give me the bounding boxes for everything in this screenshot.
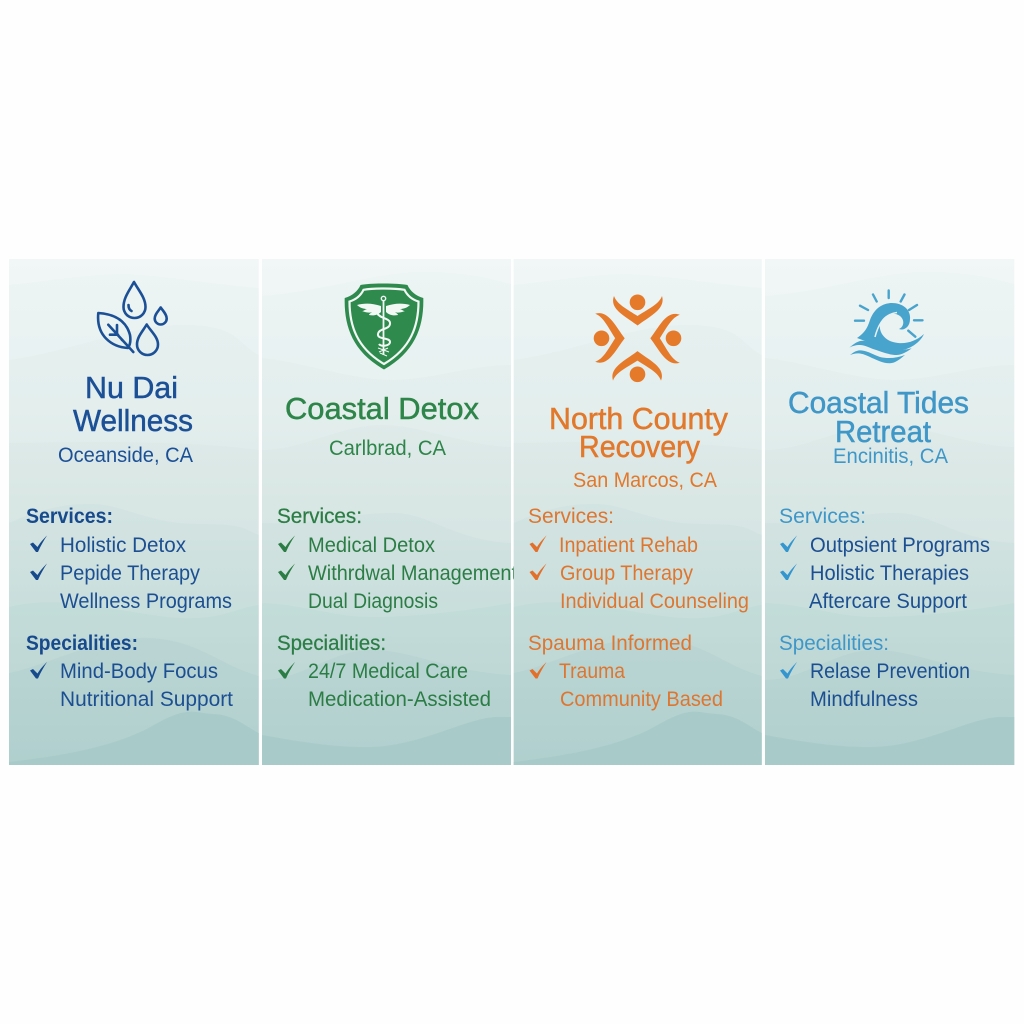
heading: Coastal Tides Retreat <box>788 385 969 449</box>
services list: Services: <box>26 504 113 528</box>
heading: Nu Dai Wellness: Wellness <box>73 403 193 438</box>
heading: North County Recovery <box>549 401 728 464</box>
specialities list: Mindfulness <box>810 688 918 711</box>
services list: Services: <box>277 504 362 528</box>
heading: Nu Dai Wellness <box>73 370 193 438</box>
specialities list: Mind-Body Focus <box>60 660 218 683</box>
services list <box>277 504 517 613</box>
heading: Coastal Tides Retreat: Coastal Tides <box>788 385 969 420</box>
specialities list <box>779 631 970 711</box>
services list <box>779 504 990 613</box>
location: Oceanside: Oceanside, CA <box>58 444 193 467</box>
specialities list: Specialities: <box>26 631 138 655</box>
heading: North County Recovery: Recovery <box>579 429 700 464</box>
heading: Coastal Tides Retreat: Retreat <box>835 414 931 449</box>
services list: Medical Detox <box>308 534 435 557</box>
icon: shield with caduceus <box>345 284 423 370</box>
heading: Nu Dai Wellness: Nu Dai <box>85 370 178 405</box>
panel: Nu Dai Wellness <box>9 259 259 765</box>
panel: Coastal Tides Retreat <box>765 259 1014 765</box>
services list: Services: <box>528 504 614 528</box>
location: San Marcos: San Marcos, CA <box>573 469 717 492</box>
services list: Pepide Therapy <box>60 562 200 585</box>
services list: Inpatient Rehab <box>559 534 698 557</box>
specialities list <box>277 631 491 711</box>
heading: Coastal Detox: Coastal Detox <box>285 391 479 426</box>
specialities list: Specialities: <box>277 631 386 655</box>
icon: sun and wave <box>849 290 924 363</box>
specialities list: Community Based <box>560 688 723 711</box>
services list: Withrdwal Management <box>308 562 517 585</box>
services list: Individual Counseling <box>560 590 749 613</box>
specialities list: 24/7 Medical Care <box>308 660 468 683</box>
services list: Group Therapy <box>560 562 693 585</box>
specialities list: Relase Prevention <box>810 660 970 683</box>
specialities list <box>528 631 723 711</box>
specialities list: Nutritional Support <box>60 688 233 711</box>
icon: four figures <box>594 294 681 382</box>
heading: North County Recovery: North County <box>549 401 728 436</box>
services list: Services: <box>779 504 866 528</box>
panel: North County Recovery <box>514 259 762 765</box>
services list: Dual Diagnosis <box>308 590 438 613</box>
icon: leaf and water drops <box>98 282 167 355</box>
specialities list: Specialities: <box>779 631 889 655</box>
panel: Coastal Detox <box>262 259 517 765</box>
location: Encinitis: Encinitis, CA <box>833 445 948 468</box>
services list: Aftercare Support <box>809 590 967 613</box>
services list: Wellness Programs <box>60 590 232 613</box>
specialities list: Spauma Informed <box>528 631 692 655</box>
specialities list: Medication-Assisted <box>308 688 491 711</box>
services list: Outpsient Programs <box>810 534 990 557</box>
specialities list <box>26 631 233 711</box>
services list <box>528 504 749 613</box>
specialities list: Trauma <box>559 660 625 683</box>
location: Carlbrad: Carlbrad, CA <box>329 437 446 460</box>
services list: Holistic Detox <box>60 534 186 557</box>
services list: Holistic Therapies <box>810 562 969 585</box>
services list <box>26 504 232 613</box>
